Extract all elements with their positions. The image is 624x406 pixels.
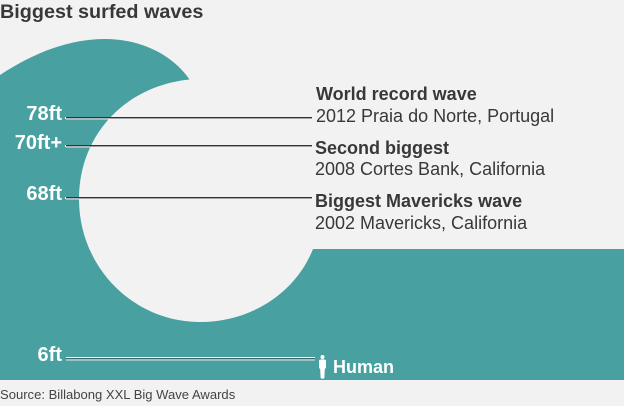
label: world record wave: World record wave xyxy=(316,84,477,104)
label: biggest mavericks wave xyxy=(315,191,528,233)
label: second biggest: Second biggest xyxy=(315,138,449,158)
title: Biggest surfed waves xyxy=(0,1,203,23)
label: second biggest: 2008 Cortes Bank, California xyxy=(315,159,546,179)
icon: human xyxy=(319,355,326,379)
source: Source: Billabong XXL Big Wave Awards xyxy=(0,387,236,402)
height marker: 70ft+: 70ft+ xyxy=(15,132,62,154)
height marker: 78ft: 78ft xyxy=(26,103,62,125)
height marker: 68ft: 68ft xyxy=(26,183,62,205)
label: biggest mavericks wave: Biggest Mavericks wave xyxy=(315,191,522,211)
height marker: 6ft: 6ft xyxy=(38,344,62,366)
label: world record wave: 2012 Praia do Norte, Portugal xyxy=(316,106,554,126)
label: human: Human xyxy=(333,357,394,377)
label: world record wave xyxy=(316,84,554,126)
label: second biggest xyxy=(315,138,546,179)
label: biggest mavericks wave: 2002 Mavericks, California xyxy=(315,213,528,233)
